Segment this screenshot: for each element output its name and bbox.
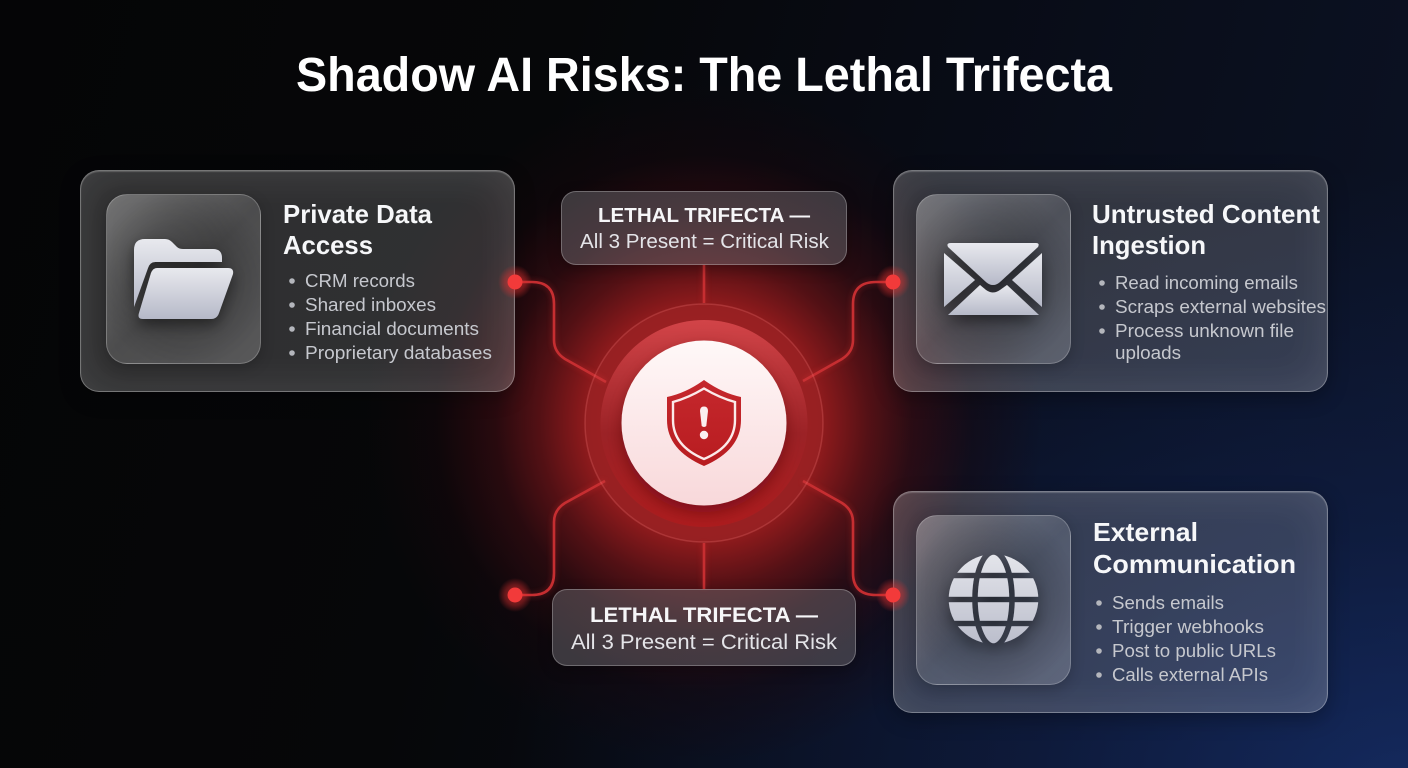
red glow behind the hub <box>304 23 1104 768</box>
list: external communication items: Calls external APIs <box>1112 664 1268 684</box>
heading: external communication: External <box>1092 516 1198 546</box>
list: external communication items <box>1096 592 1276 684</box>
callout text: bottom: LETHAL TRIFECTA — <box>590 602 818 626</box>
node: untrusted content <box>876 265 910 299</box>
heading: private data access <box>282 198 432 260</box>
node: external communication <box>876 578 910 612</box>
list: private data items: Financial documents <box>304 318 478 338</box>
callout text: top: LETHAL TRIFECTA — <box>598 204 810 226</box>
connector: top label <box>703 265 705 303</box>
icon: folder <box>134 238 233 318</box>
panel: untrusted content ingestion <box>893 170 1328 392</box>
heading: private data access: Access <box>282 230 372 260</box>
panel: external communication <box>893 491 1328 713</box>
icon: envelope <box>944 242 1042 314</box>
connector: bottom label <box>703 543 705 589</box>
heading: untrusted content ingestion <box>1092 198 1320 260</box>
hub middle ring <box>600 320 808 527</box>
list: private data items <box>289 270 492 362</box>
heading: untrusted content ingestion: Ingestion <box>1092 230 1206 260</box>
callout text: bottom <box>570 602 837 654</box>
central hub <box>584 303 824 543</box>
icon tile: globe <box>916 515 1071 685</box>
connector: lower left node <box>515 481 605 595</box>
icon: globe <box>946 554 1042 652</box>
connector: private data <box>515 282 606 382</box>
list: untrusted content items <box>1099 272 1326 362</box>
list: private data items: CRM records <box>304 270 414 290</box>
callout text: top: All 3 Present = Critical Risk <box>580 230 829 252</box>
heading: untrusted content ingestion: Untrusted Content <box>1092 198 1320 228</box>
list: private data items: Shared inboxes <box>304 294 436 314</box>
icon tile: envelope <box>916 194 1071 364</box>
list: untrusted content items: Process unknown file <box>1114 320 1294 340</box>
list: external communication items: Post to public URLs <box>1112 640 1276 660</box>
hub white core <box>622 340 786 506</box>
list: private data items: Proprietary databases <box>304 342 492 362</box>
connector glow <box>515 265 893 595</box>
node: lower left <box>498 578 532 612</box>
hub outer ring <box>585 304 823 542</box>
panel content: private data <box>129 198 492 363</box>
list: external communication items: Sends emails <box>1112 592 1224 612</box>
callout text: top <box>580 204 829 252</box>
icon tile: folder <box>106 194 261 364</box>
list: untrusted content items: Scraps external websites <box>1114 296 1326 316</box>
title: Shadow AI Risks: The Lethal Trifecta <box>296 49 1112 102</box>
heading: external communication <box>1092 516 1296 578</box>
callout text: bottom: All 3 Present = Critical Risk <box>570 630 837 654</box>
heading: external communication: Communication <box>1092 548 1296 578</box>
panel content: untrusted content <box>938 198 1326 363</box>
callout: top label <box>561 191 847 265</box>
connector: external communication <box>803 481 893 595</box>
panel: private data access <box>80 170 515 392</box>
callout: bottom label <box>552 589 856 666</box>
heading: private data access: Private Data <box>282 198 432 228</box>
list: untrusted content items: uploads <box>1114 342 1180 362</box>
icon: shield with exclamation <box>667 380 741 466</box>
list: external communication items: Trigger webhooks <box>1112 616 1264 636</box>
connector: untrusted content <box>803 282 893 381</box>
node: private data <box>498 265 532 299</box>
panel content: external communication <box>946 516 1296 684</box>
list: untrusted content items: Read incoming emails <box>1114 272 1298 292</box>
